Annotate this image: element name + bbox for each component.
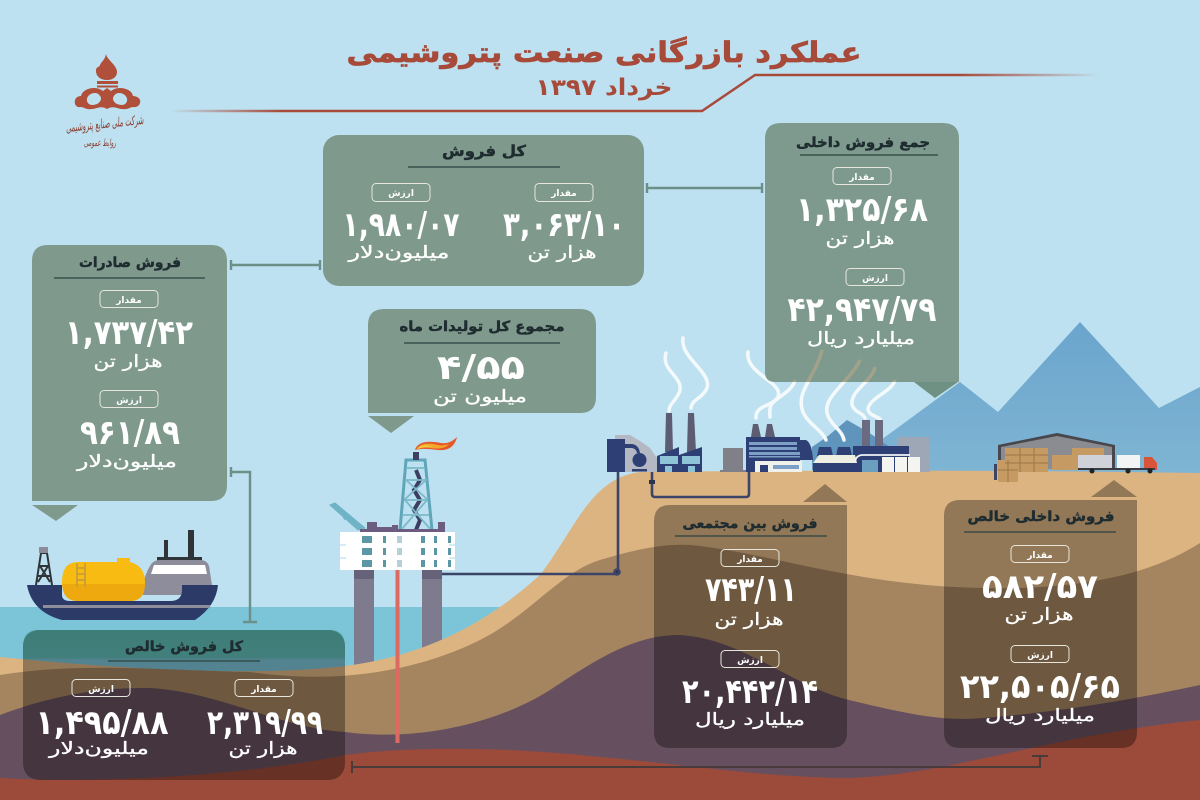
superstructure bbox=[143, 560, 212, 601]
heading: فروش بین مجتمعی bbox=[682, 516, 818, 532]
unit: thousand tons: هزار تن bbox=[826, 229, 894, 249]
oil platform bbox=[330, 437, 457, 570]
pipeline bbox=[442, 468, 749, 574]
panel: total domestic sales bbox=[765, 123, 959, 416]
panel: export sales bbox=[32, 245, 227, 521]
stat: quantity: ۲,۳۱۹/۹۹ bbox=[207, 703, 323, 743]
chip: quantity: مقدار bbox=[1026, 551, 1053, 561]
stat: value: ۲۰,۴۴۲/۱۴ bbox=[682, 672, 818, 712]
factory: right unit bbox=[813, 420, 930, 472]
unit: thousand tons: هزار تن bbox=[528, 243, 596, 263]
panel: total monthly production bbox=[368, 309, 596, 433]
factory: main building bbox=[746, 424, 813, 472]
funnels bbox=[164, 540, 168, 558]
hull bbox=[27, 585, 218, 620]
unit: million dollars: میلیون‌دلار bbox=[48, 739, 149, 759]
chip: quantity bbox=[721, 550, 779, 566]
unit: thousand tons: هزار تن bbox=[228, 739, 298, 759]
sea bbox=[0, 607, 600, 707]
factory: stacks bbox=[657, 413, 702, 472]
unit: million dollars: میلیون‌دلار bbox=[347, 243, 450, 263]
chip: value: ارزش bbox=[388, 189, 414, 199]
chip: quantity bbox=[535, 184, 593, 202]
chip: value: ارزش bbox=[88, 685, 114, 695]
steam bbox=[665, 338, 895, 440]
warehouse and truck bbox=[994, 433, 1157, 482]
chip: quantity bbox=[1011, 546, 1069, 562]
stat: quantity: ۷۴۳/۱۱ bbox=[705, 570, 797, 610]
chip: quantity: مقدار bbox=[550, 189, 577, 199]
panel: total net sales bbox=[23, 630, 345, 780]
back mountain bbox=[812, 420, 890, 470]
stat: value: ۱,۹۸۰/۰۷ bbox=[342, 205, 460, 245]
connector: exports to net total bbox=[231, 467, 257, 622]
connector: exports to total sales bbox=[231, 260, 320, 270]
chip: quantity: مقدار bbox=[736, 555, 763, 565]
unit: billion rials: میلیارد ریال bbox=[807, 329, 915, 349]
chip: value: ارزش bbox=[116, 396, 142, 406]
well shaft bbox=[396, 570, 400, 743]
chip: value bbox=[846, 268, 904, 286]
yellow tank bbox=[62, 558, 145, 601]
chip: value: ارزش bbox=[1027, 651, 1053, 661]
connector: net total to net domestic bbox=[352, 756, 1048, 773]
panel: total sales bbox=[323, 135, 644, 286]
heading: کل فروش bbox=[442, 142, 526, 160]
unit: billion rials: میلیارد ریال bbox=[985, 706, 1095, 726]
stat: value: ۲۲,۵۰۵/۶۵ bbox=[960, 667, 1120, 707]
factory: grey silos bbox=[720, 448, 746, 472]
chip: quantity bbox=[235, 680, 293, 696]
connector: total sales to domestic total bbox=[647, 183, 762, 193]
steam behind panel bbox=[792, 350, 896, 382]
unit: million dollars: میلیون‌دلار bbox=[76, 452, 177, 472]
stat: quantity: ۱,۳۲۵/۶۸ bbox=[796, 190, 928, 230]
crane bbox=[330, 503, 365, 530]
derrick bbox=[400, 460, 432, 530]
unit: thousand tons: هزار تن bbox=[714, 610, 784, 630]
heading: فروش صادرات bbox=[79, 255, 181, 271]
unit: billion rials: میلیارد ریال bbox=[695, 710, 805, 730]
factory: background tower bbox=[615, 435, 657, 472]
chip: value: ارزش bbox=[737, 656, 763, 666]
panel: net domestic sales bbox=[944, 480, 1137, 748]
title: عملکرد بازرگانی صنعت پتروشیمی bbox=[346, 36, 862, 69]
stat: value: ۹۶۱/۸۹ bbox=[80, 413, 180, 453]
icon: flare flame bbox=[415, 437, 457, 450]
chip: value bbox=[721, 650, 779, 668]
stat: production: ۴/۵۵ bbox=[437, 348, 525, 388]
heading: فروش داخلی خالص bbox=[968, 509, 1114, 525]
stat: quantity: ۵۸۲/۵۷ bbox=[982, 567, 1098, 607]
logo bbox=[65, 54, 145, 149]
factories bbox=[607, 413, 930, 472]
chip: value bbox=[72, 680, 130, 696]
stat: value: ۱,۴۹۵/۸۸ bbox=[36, 703, 169, 743]
heading: جمع فروش داخلی bbox=[796, 135, 930, 151]
factory: vessel bbox=[607, 439, 647, 472]
chip: quantity bbox=[833, 168, 891, 184]
panel: inter-complex sales bbox=[654, 484, 847, 748]
chip: value bbox=[372, 184, 430, 202]
mountains bbox=[840, 322, 1200, 475]
deck top bbox=[360, 522, 445, 532]
chip: quantity: مقدار bbox=[250, 685, 277, 695]
heading: مجموع کل تولیدات ماه bbox=[400, 319, 564, 335]
chip: quantity bbox=[100, 290, 158, 308]
stat: quantity: ۱,۷۳۷/۴۲ bbox=[65, 313, 193, 353]
small derrick bbox=[36, 553, 52, 585]
logo text: شرکت ملی صنایع پتروشیمی bbox=[65, 113, 145, 136]
unit: million tons: میلیون تن bbox=[433, 387, 527, 407]
unit: thousand tons: هزار تن bbox=[1004, 605, 1074, 625]
subtitle: خرداد ۱۳۹۷ bbox=[536, 75, 672, 101]
oil platform legs bbox=[354, 570, 442, 670]
heading: کل فروش خالص bbox=[125, 639, 244, 655]
deck bbox=[340, 532, 455, 570]
chip: quantity: مقدار bbox=[848, 173, 875, 183]
chip: value bbox=[1011, 646, 1069, 662]
stat: value: ۴۲,۹۴۷/۷۹ bbox=[788, 290, 937, 330]
chip: quantity: مقدار bbox=[115, 296, 142, 306]
logo: روابط عمومی bbox=[84, 138, 116, 149]
stat: quantity: ۳,۰۶۳/۱۰ bbox=[503, 205, 625, 245]
chip: value: ارزش bbox=[862, 274, 888, 284]
ship bbox=[27, 530, 218, 620]
unit: thousand tons: هزار تن bbox=[94, 352, 162, 372]
title line bbox=[170, 75, 1100, 111]
chip: value bbox=[100, 390, 158, 408]
ground layers bbox=[0, 471, 1200, 800]
